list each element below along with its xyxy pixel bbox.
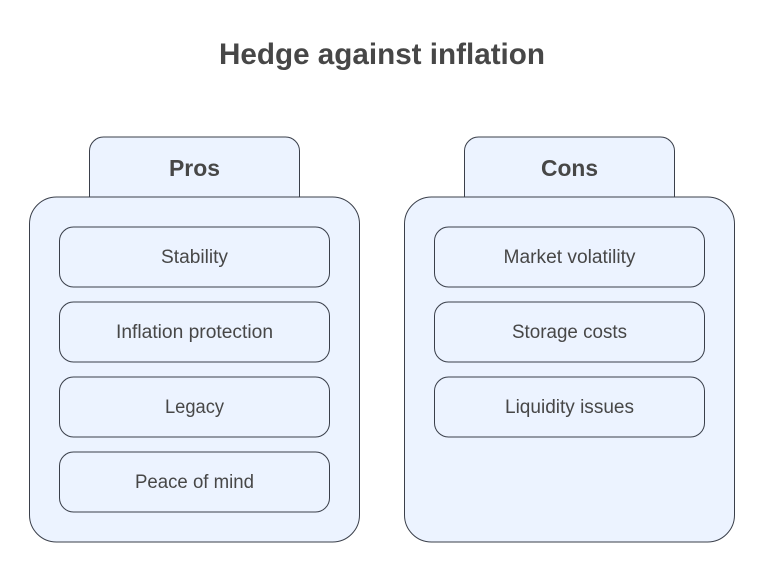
- panel: pros: [30, 137, 360, 542]
- item: inflation protection: Inflation protection: [116, 322, 273, 343]
- item: market volatility: Market volatility: [504, 247, 636, 268]
- pros tab: Pros: [169, 155, 220, 181]
- item: stability: Stability: [161, 247, 229, 268]
- item: storage costs: Storage costs: [512, 322, 627, 343]
- item: legacy: [60, 377, 330, 437]
- pros body: [30, 197, 360, 542]
- cons tab: Cons: [541, 155, 598, 181]
- pros tab: [90, 137, 300, 197]
- item: legacy: Legacy: [165, 397, 224, 418]
- item: storage costs: [434, 302, 704, 362]
- panel: cons: [404, 137, 734, 542]
- item: inflation protection: [60, 302, 330, 362]
- cons body: [404, 197, 734, 542]
- item: peace of mind: Peace of mind: [135, 472, 254, 493]
- item: stability: [60, 227, 330, 287]
- title: Hedge against inflation: [219, 38, 545, 71]
- item: liquidity issues: [434, 377, 704, 437]
- item: market volatility: [434, 227, 704, 287]
- item: peace of mind: [60, 452, 330, 512]
- cons tab: [464, 137, 674, 197]
- item: liquidity issues: Liquidity issues: [505, 397, 634, 418]
